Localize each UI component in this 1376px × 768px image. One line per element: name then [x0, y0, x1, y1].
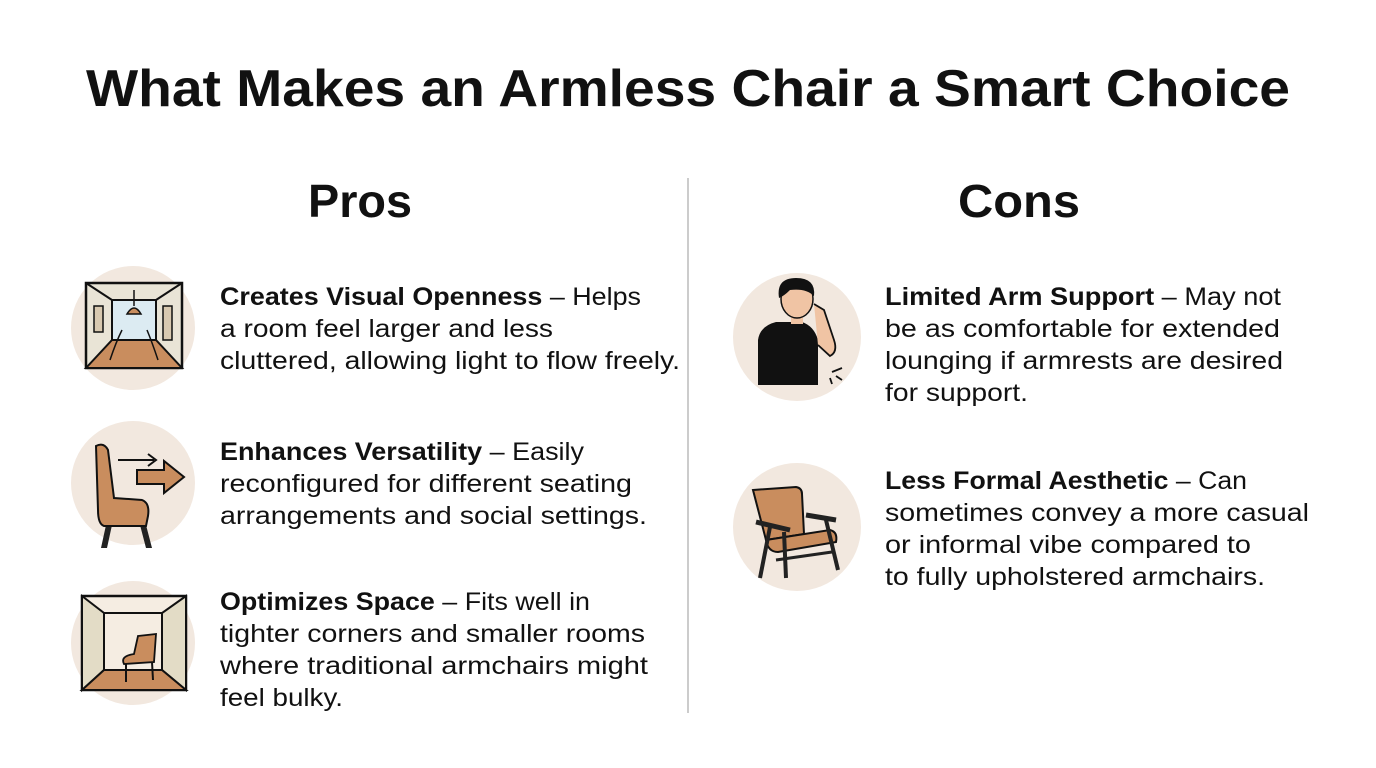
- text: Optimizes Space: tighter corners and smaller rooms: [220, 620, 645, 648]
- text: Optimizes Space: [219, 588, 648, 712]
- text: Creates Visual Openness: cluttered, allowing light to flow freely.: [220, 347, 680, 375]
- text: Creates Visual Openness: [220, 283, 680, 375]
- text: Enhances Versatility: Enhances Versatility – Easily: [220, 438, 585, 466]
- icon: person touching shoulder: [733, 273, 861, 401]
- text: Limited Arm Support: be as comfortable for extended: [885, 315, 1280, 343]
- heading: Cons: Cons: [958, 175, 1080, 227]
- text: Creates Visual Openness: Creates Visual Openness – Helps: [220, 283, 641, 311]
- icon: chair with arrows: [71, 421, 195, 548]
- text: Less Formal Aesthetic: to fully upholstered armchairs.: [885, 563, 1265, 591]
- text: Less Formal Aesthetic: Less Formal Aesthetic – Can: [885, 467, 1247, 495]
- text: Optimizes Space: where traditional armchairs might: [219, 652, 648, 680]
- icon: open room: [71, 266, 195, 390]
- text: Enhances Versatility: arrangements and social settings.: [220, 502, 647, 530]
- text: Limited Arm Support: [885, 283, 1283, 407]
- text: Optimizes Space: feel bulky.: [220, 684, 343, 712]
- text: Optimizes Space: Optimizes Space – Fits well in: [220, 588, 590, 616]
- title: What Makes an Armless Chair a Smart Choice: [86, 60, 1290, 118]
- text: Less Formal Aesthetic: or informal vibe compared to: [885, 531, 1251, 559]
- text: Enhances Versatility: reconfigured for different seating: [220, 470, 632, 498]
- text: Limited Arm Support: for support.: [885, 379, 1028, 407]
- panel: cons: [733, 273, 1309, 591]
- panel: pros: [71, 266, 680, 712]
- icon: armchair: [733, 463, 861, 591]
- text: Less Formal Aesthetic: sometimes convey a more casual: [885, 499, 1309, 527]
- text: Enhances Versatility: [220, 438, 647, 530]
- icon: chair in small room: [71, 581, 195, 705]
- text: Less Formal Aesthetic: [885, 467, 1309, 591]
- text: Limited Arm Support: lounging if armrests are desired: [885, 347, 1283, 375]
- text: Limited Arm Support: Limited Arm Support – May not: [885, 283, 1281, 311]
- heading: Pros: Pros: [308, 175, 412, 227]
- text: Creates Visual Openness: a room feel larger and less: [220, 315, 553, 343]
